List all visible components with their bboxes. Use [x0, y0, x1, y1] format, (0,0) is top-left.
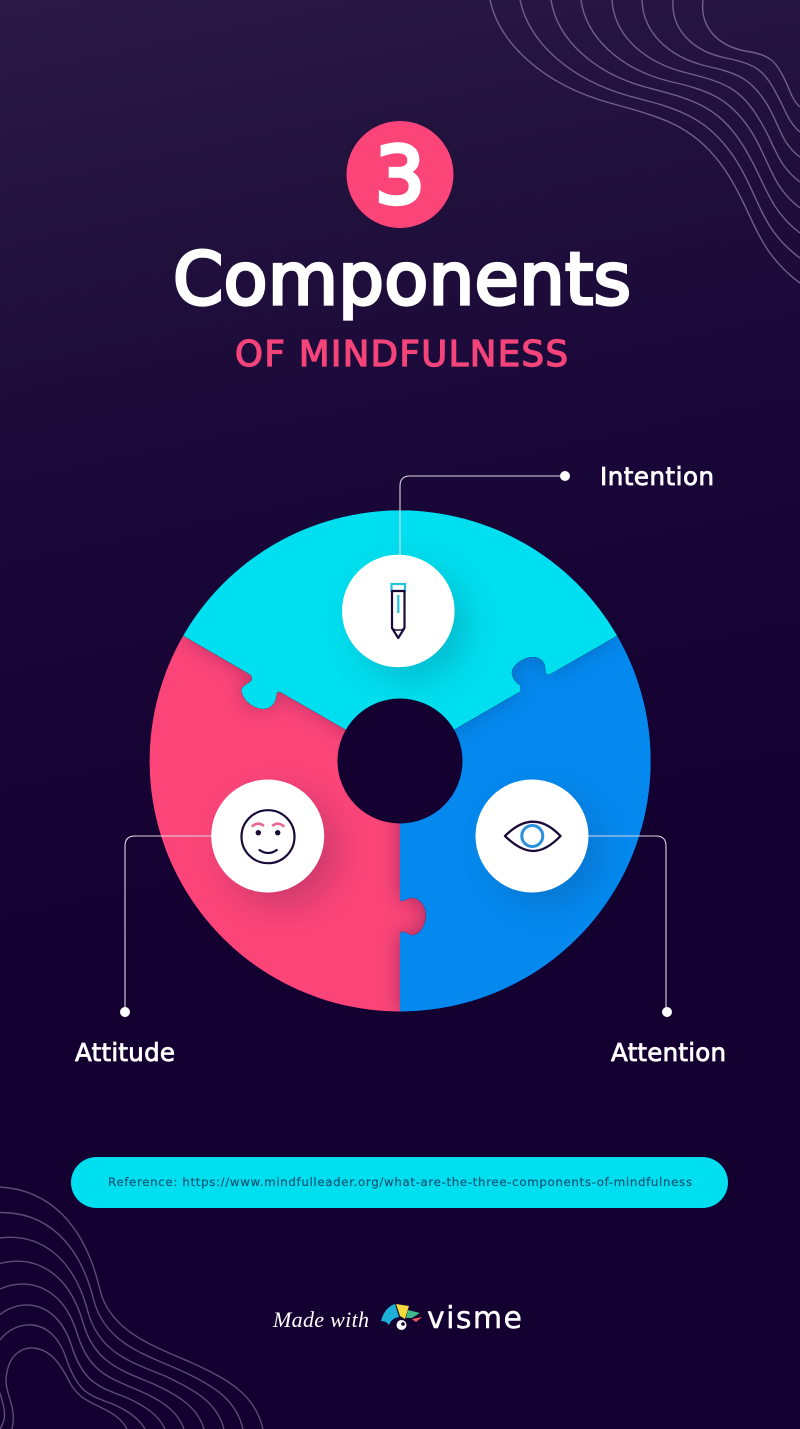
footer: made with visme: visme — [427, 1301, 522, 1336]
connector: Attitude — [120, 836, 212, 1017]
segment: intention (cyan) — [183, 510, 617, 730]
center hole — [338, 698, 462, 824]
icon: eye — [476, 780, 588, 892]
connector: Attention — [588, 836, 672, 1017]
subtitle: of mindfulness: OF MINDFULNESS — [235, 334, 568, 375]
decorative wave lines: top right — [490, 0, 800, 283]
reference pill — [71, 1157, 728, 1208]
icon: visme logo — [381, 1304, 422, 1330]
number badge: 3 — [346, 121, 454, 228]
label: Intention: Intention — [600, 462, 714, 491]
label: Attention: Attention — [611, 1038, 726, 1067]
reference pill: Reference: https://www.mindfulleader.org/what-are-the-three-components-of-mindfulness — [108, 1175, 692, 1189]
segment: attention (blue) — [400, 636, 651, 1012]
footer: made with visme: Made with — [272, 1307, 369, 1332]
segment: attitude (pink) — [150, 636, 426, 1012]
icon: pencil — [342, 555, 455, 667]
decorative wave lines: bottom left — [0, 1187, 263, 1429]
icon: smiley face — [211, 780, 324, 892]
puzzle wheel — [150, 510, 651, 1012]
footer: made with visme — [272, 1301, 522, 1336]
title: Components: Components — [173, 237, 631, 321]
label: Attitude: Attitude — [75, 1038, 175, 1067]
connector: Intention — [400, 471, 570, 555]
number badge: 3: 3 — [375, 132, 425, 222]
